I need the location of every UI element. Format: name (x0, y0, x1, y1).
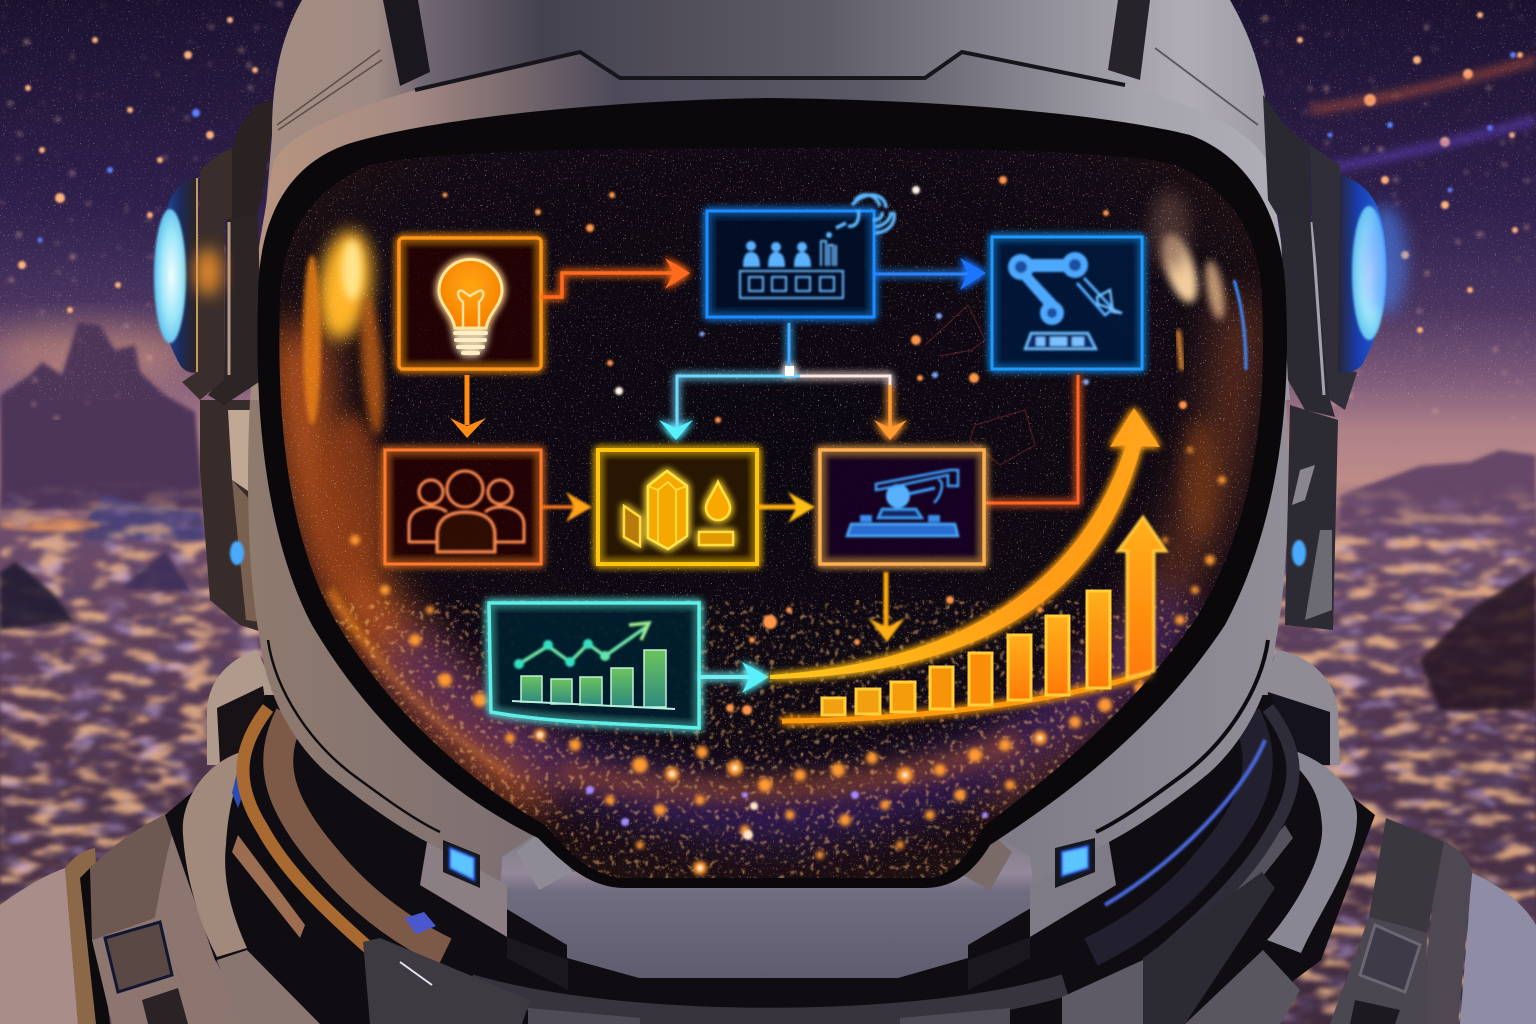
arrow: analytics to growth (700, 662, 769, 693)
box: digital operations (707, 195, 894, 317)
large up arrow (1118, 517, 1166, 678)
rim chin plate (500, 828, 1036, 978)
lower collar blocks (363, 872, 1275, 1024)
icon: crystal, droplet and bar (624, 471, 733, 549)
flow diagram (385, 195, 1166, 728)
icon: lightbulb (439, 260, 502, 353)
visor glass (270, 130, 1270, 890)
inner collar rings (243, 708, 1293, 1019)
left neck ring (183, 753, 320, 1024)
arrow: team to resources (541, 492, 592, 522)
right rim indicator (1055, 838, 1095, 888)
visor star speckle (270, 130, 1270, 890)
box: robotics (992, 237, 1142, 369)
arrow: machine down (868, 572, 905, 642)
left rim indicator (443, 840, 480, 888)
distant mountains (0, 322, 1536, 540)
box: analytics chart (489, 603, 699, 728)
growth bars (822, 591, 1110, 715)
left ear module (154, 100, 272, 632)
growth chart baseline (782, 672, 1150, 721)
lower helmet rim (248, 400, 1288, 990)
visor upper bright stars (442, 176, 1187, 715)
icon: people (409, 471, 524, 552)
right neck ring (1185, 752, 1357, 1024)
mini chart bars (521, 650, 666, 707)
right arm and shoulder (1330, 818, 1536, 1024)
branching connector (659, 323, 907, 440)
left lower strip (200, 400, 262, 632)
arrow: idea to digital operations (541, 258, 690, 297)
faint red reflection shapes (925, 305, 1035, 465)
brim band (250, 52, 1290, 300)
rear collar boxes (207, 650, 1340, 765)
top panel grooves (277, 0, 1258, 130)
visor black seal (257, 98, 1287, 888)
growth curve arrow (770, 408, 1160, 679)
arrow: resources to machine (757, 492, 815, 523)
arrow: idea to team (450, 375, 486, 438)
icon: industrial machine (847, 470, 958, 536)
visor edge reflection glow (300, 190, 1246, 800)
connector: resources to analytics (675, 566, 679, 602)
left arm and shoulder (0, 800, 250, 1024)
right ear module (1263, 95, 1407, 630)
right lower strip (1285, 405, 1338, 630)
visor band of orange galaxies (290, 447, 1250, 880)
collar base (165, 695, 1375, 1024)
helmet shell (250, 0, 1290, 400)
right blue indicator (1292, 540, 1306, 566)
icon: people on conveyor with signal (740, 195, 894, 298)
mini trend line (514, 623, 649, 669)
box: resources (598, 450, 757, 564)
box: machine (820, 450, 984, 564)
box: team (385, 450, 541, 564)
icon: robot arm (1008, 252, 1122, 349)
left blue indicator (230, 541, 244, 565)
connector: robotics to machine (985, 375, 1078, 503)
sky stars (0, 0, 1536, 420)
landscape texture (0, 480, 1536, 1024)
box: idea lightbulb (399, 238, 541, 369)
right window reflections (1156, 229, 1204, 307)
arrow: digital operations to robotics (875, 258, 986, 290)
